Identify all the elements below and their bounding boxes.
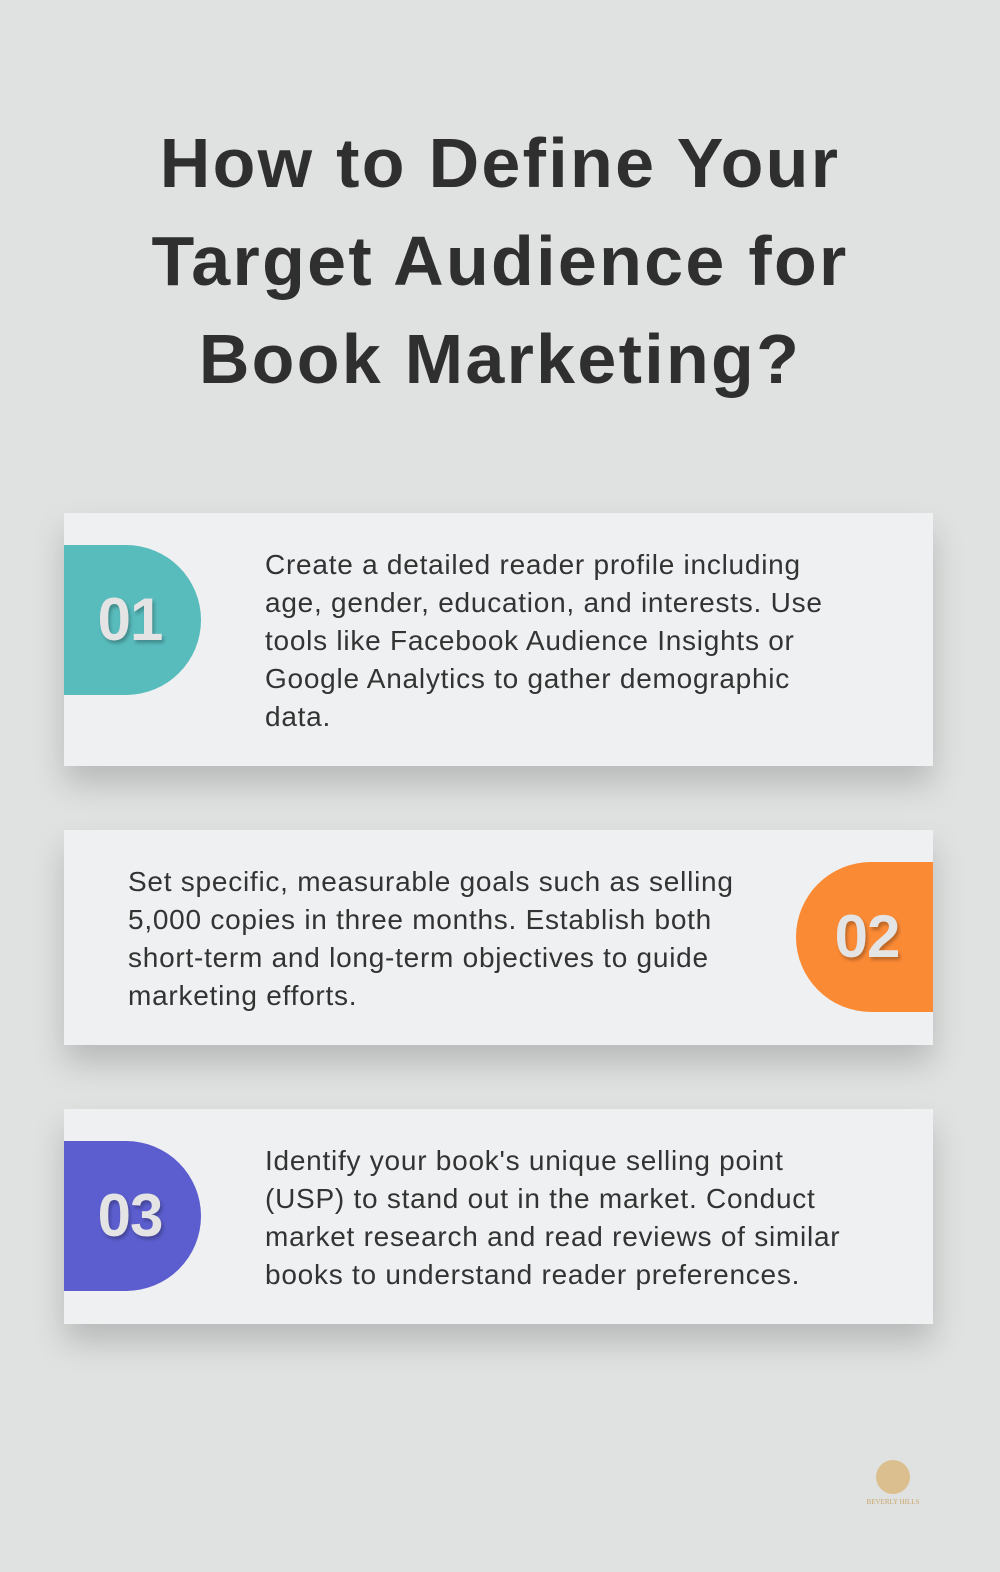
- panel: step 1: [64, 513, 933, 766]
- text step 1: Create a detailed reader profile including age, gender, education, and interests. Use tools like Facebook Audience Insights or Google Analytics to gather demographic data.: [265, 549, 823, 732]
- badge 01: 01: [98, 586, 162, 653]
- logo: [866, 1460, 919, 1506]
- badge 03: 03: [98, 1182, 162, 1249]
- panel: step 2: [64, 830, 933, 1045]
- title: Book Marketing?: [199, 320, 801, 398]
- badge 02: [796, 862, 933, 1012]
- logo: BEVERLY HILLS: [867, 1498, 919, 1506]
- text step 2: Set specific, measurable goals such as selling 5,000 copies in three months. Establish both short-term and long-term objectives to guide marketing efforts.: [128, 866, 734, 1011]
- badge 02: 02: [835, 903, 899, 970]
- title: How to Define Your: [160, 124, 840, 202]
- badge 01: [64, 545, 201, 695]
- panel: step 3: [64, 1109, 933, 1324]
- title: [151, 124, 849, 398]
- badge 03: [64, 1141, 201, 1291]
- title: Target Audience for: [151, 222, 849, 300]
- text step 3: Identify your book's unique selling point (USP) to stand out in the market. Conduct market research and read reviews of similar books to understand reader preferences.: [265, 1145, 840, 1290]
